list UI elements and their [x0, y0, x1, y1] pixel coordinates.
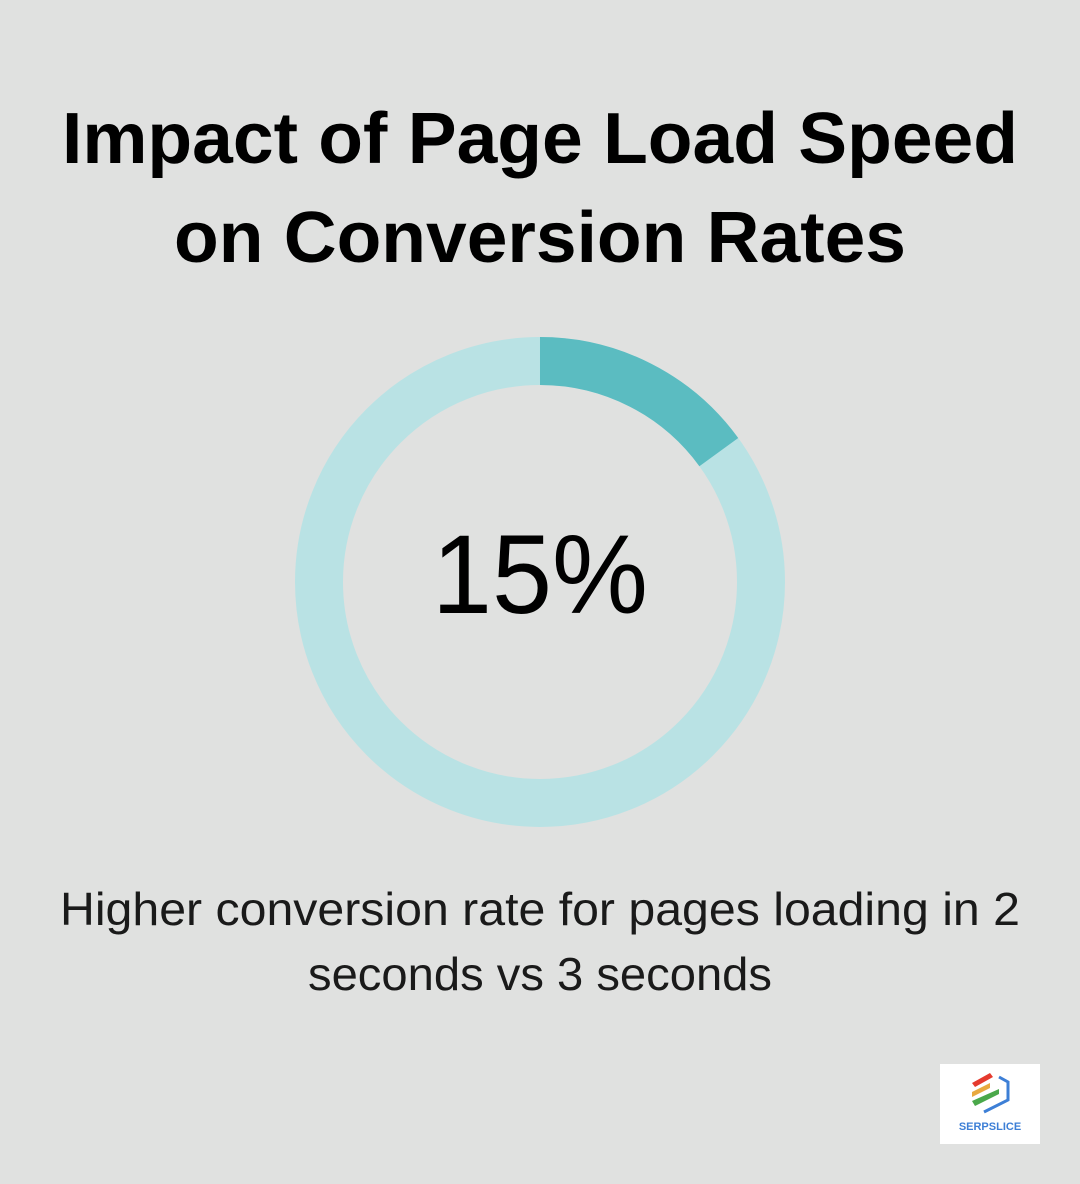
title: on Conversion Rates	[174, 198, 906, 278]
stat value: 15%	[432, 512, 648, 637]
title	[62, 99, 1018, 278]
logo: serpslice	[940, 1064, 1040, 1144]
logo: serpslice: SERPSLICE	[959, 1121, 1021, 1133]
description text	[60, 883, 1020, 1000]
title: Impact of Page Load Speed	[62, 99, 1018, 179]
description text: Higher conversion rate for pages loading in 2	[60, 883, 1020, 935]
donut chart	[319, 361, 761, 803]
description text: seconds vs 3 seconds	[308, 948, 772, 1000]
